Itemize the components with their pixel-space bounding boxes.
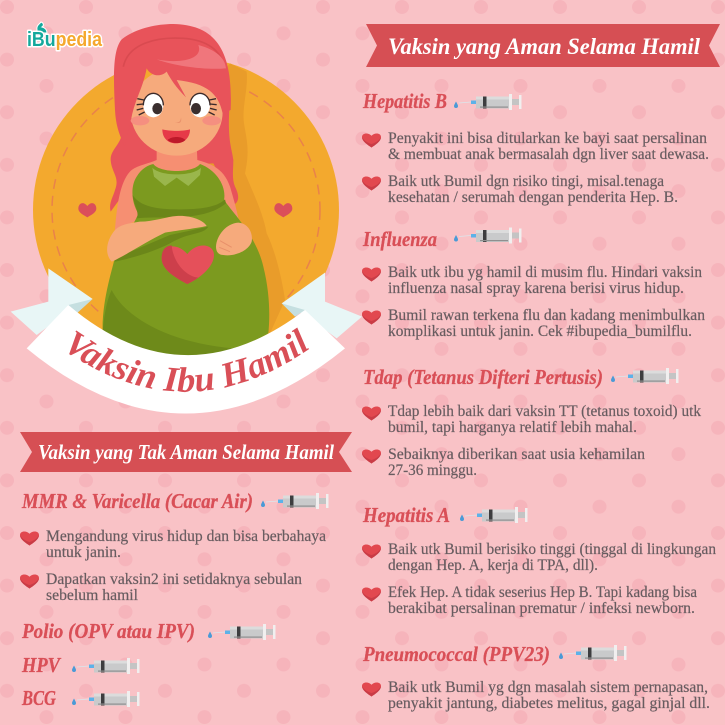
text block: berakibat persalinan prematur / infeksi newborn. xyxy=(388,600,695,617)
heading: Tdap: Tdap (Tetanus Difteri Pertusis) xyxy=(363,365,603,389)
section: MMR and Varicella xyxy=(20,489,328,604)
text block: Tdap lebih baik dari vaksin TT (tetanus toxoid) utk xyxy=(388,403,701,420)
banner: safe vaccines: Vaksin yang Aman Selama Hamil xyxy=(388,34,701,59)
text block: kesehatan / serumah dengan penderita Hep. B. xyxy=(388,189,678,206)
section: BCG xyxy=(21,686,140,710)
text block: & membuat anak bermasalah dgn liver saat dewasa. xyxy=(388,146,709,163)
mouth xyxy=(162,129,190,143)
heading: Hepatitis B: Hepatitis B xyxy=(362,89,447,113)
text block xyxy=(388,403,701,436)
text block xyxy=(388,584,697,617)
nose xyxy=(175,117,181,123)
icon: syringe xyxy=(454,228,522,244)
hair shadow on circle xyxy=(200,63,285,333)
section: Pneumococcal xyxy=(362,642,710,712)
cheeks xyxy=(131,116,221,125)
text block: Mengandung virus hidup dan bisa berbahaya xyxy=(46,528,326,545)
icon: heart bullet xyxy=(362,133,381,148)
text block xyxy=(388,679,710,712)
heading: Hepatitis A: Hepatitis A xyxy=(362,503,450,527)
shoulders and neck xyxy=(115,143,239,230)
collar xyxy=(152,168,201,186)
heading: MMR: MMR & Varicella (Cacar Air) xyxy=(21,489,253,513)
icon: heart bullet xyxy=(20,531,39,546)
text block: Baik utk ibu yg hamil di musim flu. Hindari vaksin xyxy=(388,264,702,281)
text block: influenza nasal spray karena berisi virus hidup. xyxy=(388,280,684,297)
hair band shading xyxy=(123,38,224,68)
icon: heart bullet xyxy=(362,544,381,558)
icon: heart bullet xyxy=(362,176,381,190)
icon: heart bullet xyxy=(362,267,381,282)
banner: safe vaccines xyxy=(366,24,720,67)
text block xyxy=(46,528,326,561)
section: Hepatitis B xyxy=(362,89,709,206)
eyes and lashes xyxy=(137,93,217,117)
small heart left xyxy=(78,203,96,217)
text block xyxy=(388,264,702,297)
text block xyxy=(46,571,302,604)
text block: Baik utk Bumil dgn risiko tingi, misal.tenaga xyxy=(388,173,664,190)
icon: syringe xyxy=(261,493,328,509)
section: Tdap xyxy=(362,365,701,479)
text block: untuk janin. xyxy=(46,544,121,561)
icon: heart bullet xyxy=(362,406,381,420)
small heart right xyxy=(274,203,292,217)
text block: dengan Hep. A, kerja di TPA, dll). xyxy=(388,557,598,574)
right hand xyxy=(216,223,252,255)
text block: bumil, tapi harganya relatif lebih mahal. xyxy=(388,419,637,436)
text block xyxy=(388,541,716,574)
text block: Bumil rawan terkena flu dan kadang menimbulkan xyxy=(388,307,705,324)
text block xyxy=(388,446,645,479)
text block: Efek Hep. A tidak seserius Hep B. Tapi kadang bisa xyxy=(388,584,697,601)
section: Hepatitis A xyxy=(362,503,716,617)
heading: Influenza: Influenza xyxy=(362,227,437,251)
orange circle badge xyxy=(33,57,339,363)
icon: heart bullet xyxy=(362,682,381,696)
text block: penyakit jantung, diabetes melitus, gagal ginjal dll. xyxy=(388,695,710,712)
ribbon title: Vaksin Ibu Hamil xyxy=(69,328,309,392)
text block: Baik utk Bumil yg dgn masalah sistem pernapasan, xyxy=(388,679,708,696)
hair top and fringe xyxy=(114,24,231,147)
dress xyxy=(103,164,269,356)
banner: unsafe vaccines xyxy=(20,432,352,472)
section: Polio: Polio (OPV atau IPV) xyxy=(21,619,195,643)
hair back xyxy=(110,100,238,212)
section: Influenza xyxy=(362,227,705,340)
illustration: pregnant mother with ribbon xyxy=(10,24,362,414)
text block: Sebaiknya diberikan saat usia kehamilan xyxy=(388,446,645,463)
text block: Baik utk Bumil berisiko tinggi (tinggal di lingkungan xyxy=(388,541,716,558)
logo: iBupedia: iBupedia xyxy=(27,29,103,51)
text block: 27-36 minggu. xyxy=(388,462,477,479)
icon: heart bullet xyxy=(20,574,39,588)
ribbon tails xyxy=(11,268,362,338)
icon: heart bullet xyxy=(362,587,381,602)
text block xyxy=(388,307,705,340)
section: HPV xyxy=(21,653,139,677)
icon: heart bullet xyxy=(362,310,381,324)
left arm and hand xyxy=(107,216,207,262)
icon: heart bullet xyxy=(362,449,381,464)
ribbon white band xyxy=(27,305,345,413)
dress shading xyxy=(133,195,226,218)
section: BCG: BCG xyxy=(21,686,56,710)
text block: Dapatkan vaksin2 ini setidaknya sebulan xyxy=(46,571,302,588)
heading: Pneumococcal: Pneumococcal (PPV23) xyxy=(362,642,550,666)
icon: syringe xyxy=(611,368,678,384)
text block: Penyakit ini bisa ditularkan ke bayi saat persalinan xyxy=(388,130,707,147)
icon: syringe xyxy=(559,645,626,661)
text block: sebelum hamil xyxy=(46,587,138,604)
icon: syringe xyxy=(460,507,528,523)
face xyxy=(131,68,223,156)
banner: unsafe vaccines: Vaksin yang Tak Aman Selama Hamil xyxy=(38,440,334,464)
text block xyxy=(388,130,709,163)
belly heart xyxy=(162,245,214,284)
hair highlight xyxy=(157,45,226,69)
text block: komplikasi untuk janin. Cek #ibupedia_bumilflu. xyxy=(388,323,692,340)
text block xyxy=(388,173,678,206)
icon: syringe xyxy=(454,94,522,110)
section: HPV: HPV xyxy=(21,653,61,677)
